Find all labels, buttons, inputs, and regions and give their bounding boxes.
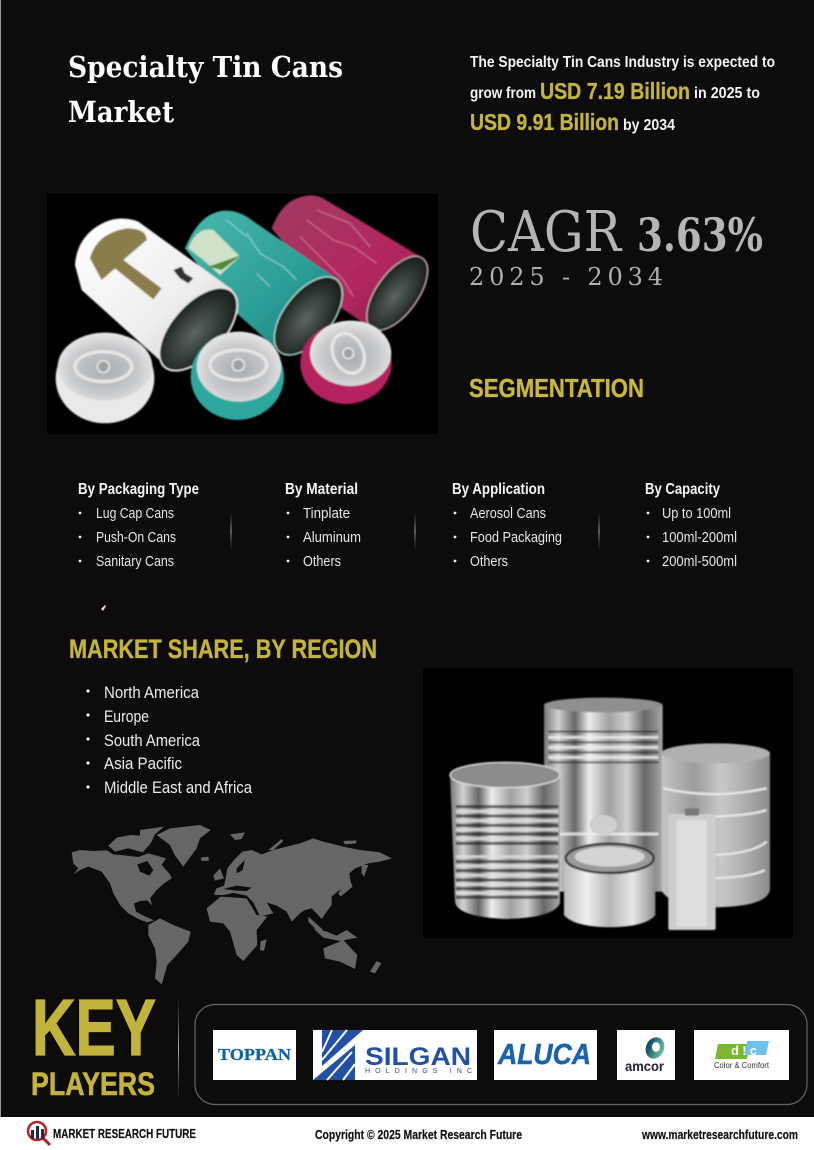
logo: Toppan: TOPPAN — [218, 1045, 292, 1064]
heading: segmentation: SEGMENTATION — [469, 373, 644, 403]
segment column: by packaging type: By Packaging Type — [78, 481, 199, 498]
footer — [0, 1117, 814, 1150]
segment column: by application: Others — [470, 553, 508, 570]
segment column: by application: Food Packaging — [470, 529, 562, 546]
region list — [86, 683, 252, 797]
segment column: by material: By Material — [285, 481, 358, 498]
world map — [72, 825, 392, 984]
segment column: by application: By Application — [452, 481, 545, 498]
logo: Aluca: ALUCA — [497, 1039, 591, 1071]
segment column: by application: Aerosol Cans — [470, 505, 546, 522]
product photo: coloured tin cans — [47, 194, 439, 434]
product photo: metal tins — [423, 668, 793, 938]
logo: Amcor — [617, 1030, 675, 1080]
logo: Aluca — [494, 1030, 597, 1080]
logo: Silgan: SILGAN — [365, 1043, 471, 1071]
market forecast summary — [470, 54, 775, 135]
logo: Amcor: amcor — [625, 1058, 665, 1074]
segment column: by capacity: 200ml-500ml — [662, 553, 737, 570]
heading: market share by region: MARKET SHARE, BY REGION — [69, 634, 377, 664]
region list: South America — [104, 731, 200, 750]
market forecast summary: USD 9.91 Billion — [470, 109, 619, 135]
segment column: by capacity: 100ml-200ml — [662, 529, 737, 546]
CAGR callout: 3.63% — [637, 208, 763, 262]
CAGR callout: 2025 - 2034 — [469, 263, 663, 291]
icon: market research future logo — [28, 1122, 50, 1145]
heading: key players — [31, 983, 156, 1102]
logo: Silgan: HOLDINGS INC — [365, 1068, 472, 1075]
region list: North America — [104, 683, 199, 702]
segment column: by application — [452, 481, 562, 570]
CAGR callout: CAGR — [470, 200, 623, 265]
small stray mark — [101, 605, 106, 611]
footer copyright: Copyright © 2025 Market Research Future — [315, 1127, 522, 1142]
footer brand: MARKET RESEARCH FUTURE — [53, 1126, 196, 1141]
CAGR callout — [469, 200, 763, 291]
segment column: by packaging type — [78, 481, 199, 570]
segment column: by capacity — [645, 481, 737, 570]
segment column: by capacity: Up to 100ml — [662, 505, 731, 522]
logo: DIC: d!c — [731, 1043, 757, 1058]
market forecast summary: by 2034 — [623, 117, 675, 134]
logo: Toppan — [213, 1030, 296, 1080]
segment column: by material: Aluminum — [303, 529, 361, 546]
segment column: by packaging type: Sanitary Cans — [96, 553, 174, 570]
region list: Asia Pacific — [104, 754, 182, 773]
logo: DIC — [694, 1030, 789, 1080]
segment column: by material: Tinplate — [303, 505, 350, 522]
segment column: by capacity: By Capacity — [645, 481, 720, 498]
title: Market — [68, 95, 175, 129]
region list: Middle East and Africa — [104, 778, 252, 797]
market forecast summary: grow from — [470, 85, 536, 102]
segment column: by material — [285, 481, 361, 570]
market forecast summary: The Specialty Tin Cans Industry is expected to — [470, 54, 775, 71]
market forecast summary: in 2025 to — [694, 85, 760, 102]
title — [68, 50, 343, 129]
market forecast summary: USD 7.19 Billion — [540, 78, 690, 104]
logo: Silgan — [313, 1030, 477, 1080]
heading: key players: PLAYERS — [31, 1066, 155, 1102]
key players logo frame — [195, 1004, 807, 1104]
heading: key players: KEY — [32, 983, 156, 1072]
segment column: by packaging type: Push-On Cans — [96, 529, 176, 546]
segment column: by packaging type: Lug Cap Cans — [96, 505, 174, 522]
region list: Europe — [104, 707, 149, 726]
title: Specialty Tin Cans — [68, 50, 343, 84]
segment column: by material: Others — [303, 553, 341, 570]
logo: DIC: Color & Comfort — [714, 1060, 770, 1070]
